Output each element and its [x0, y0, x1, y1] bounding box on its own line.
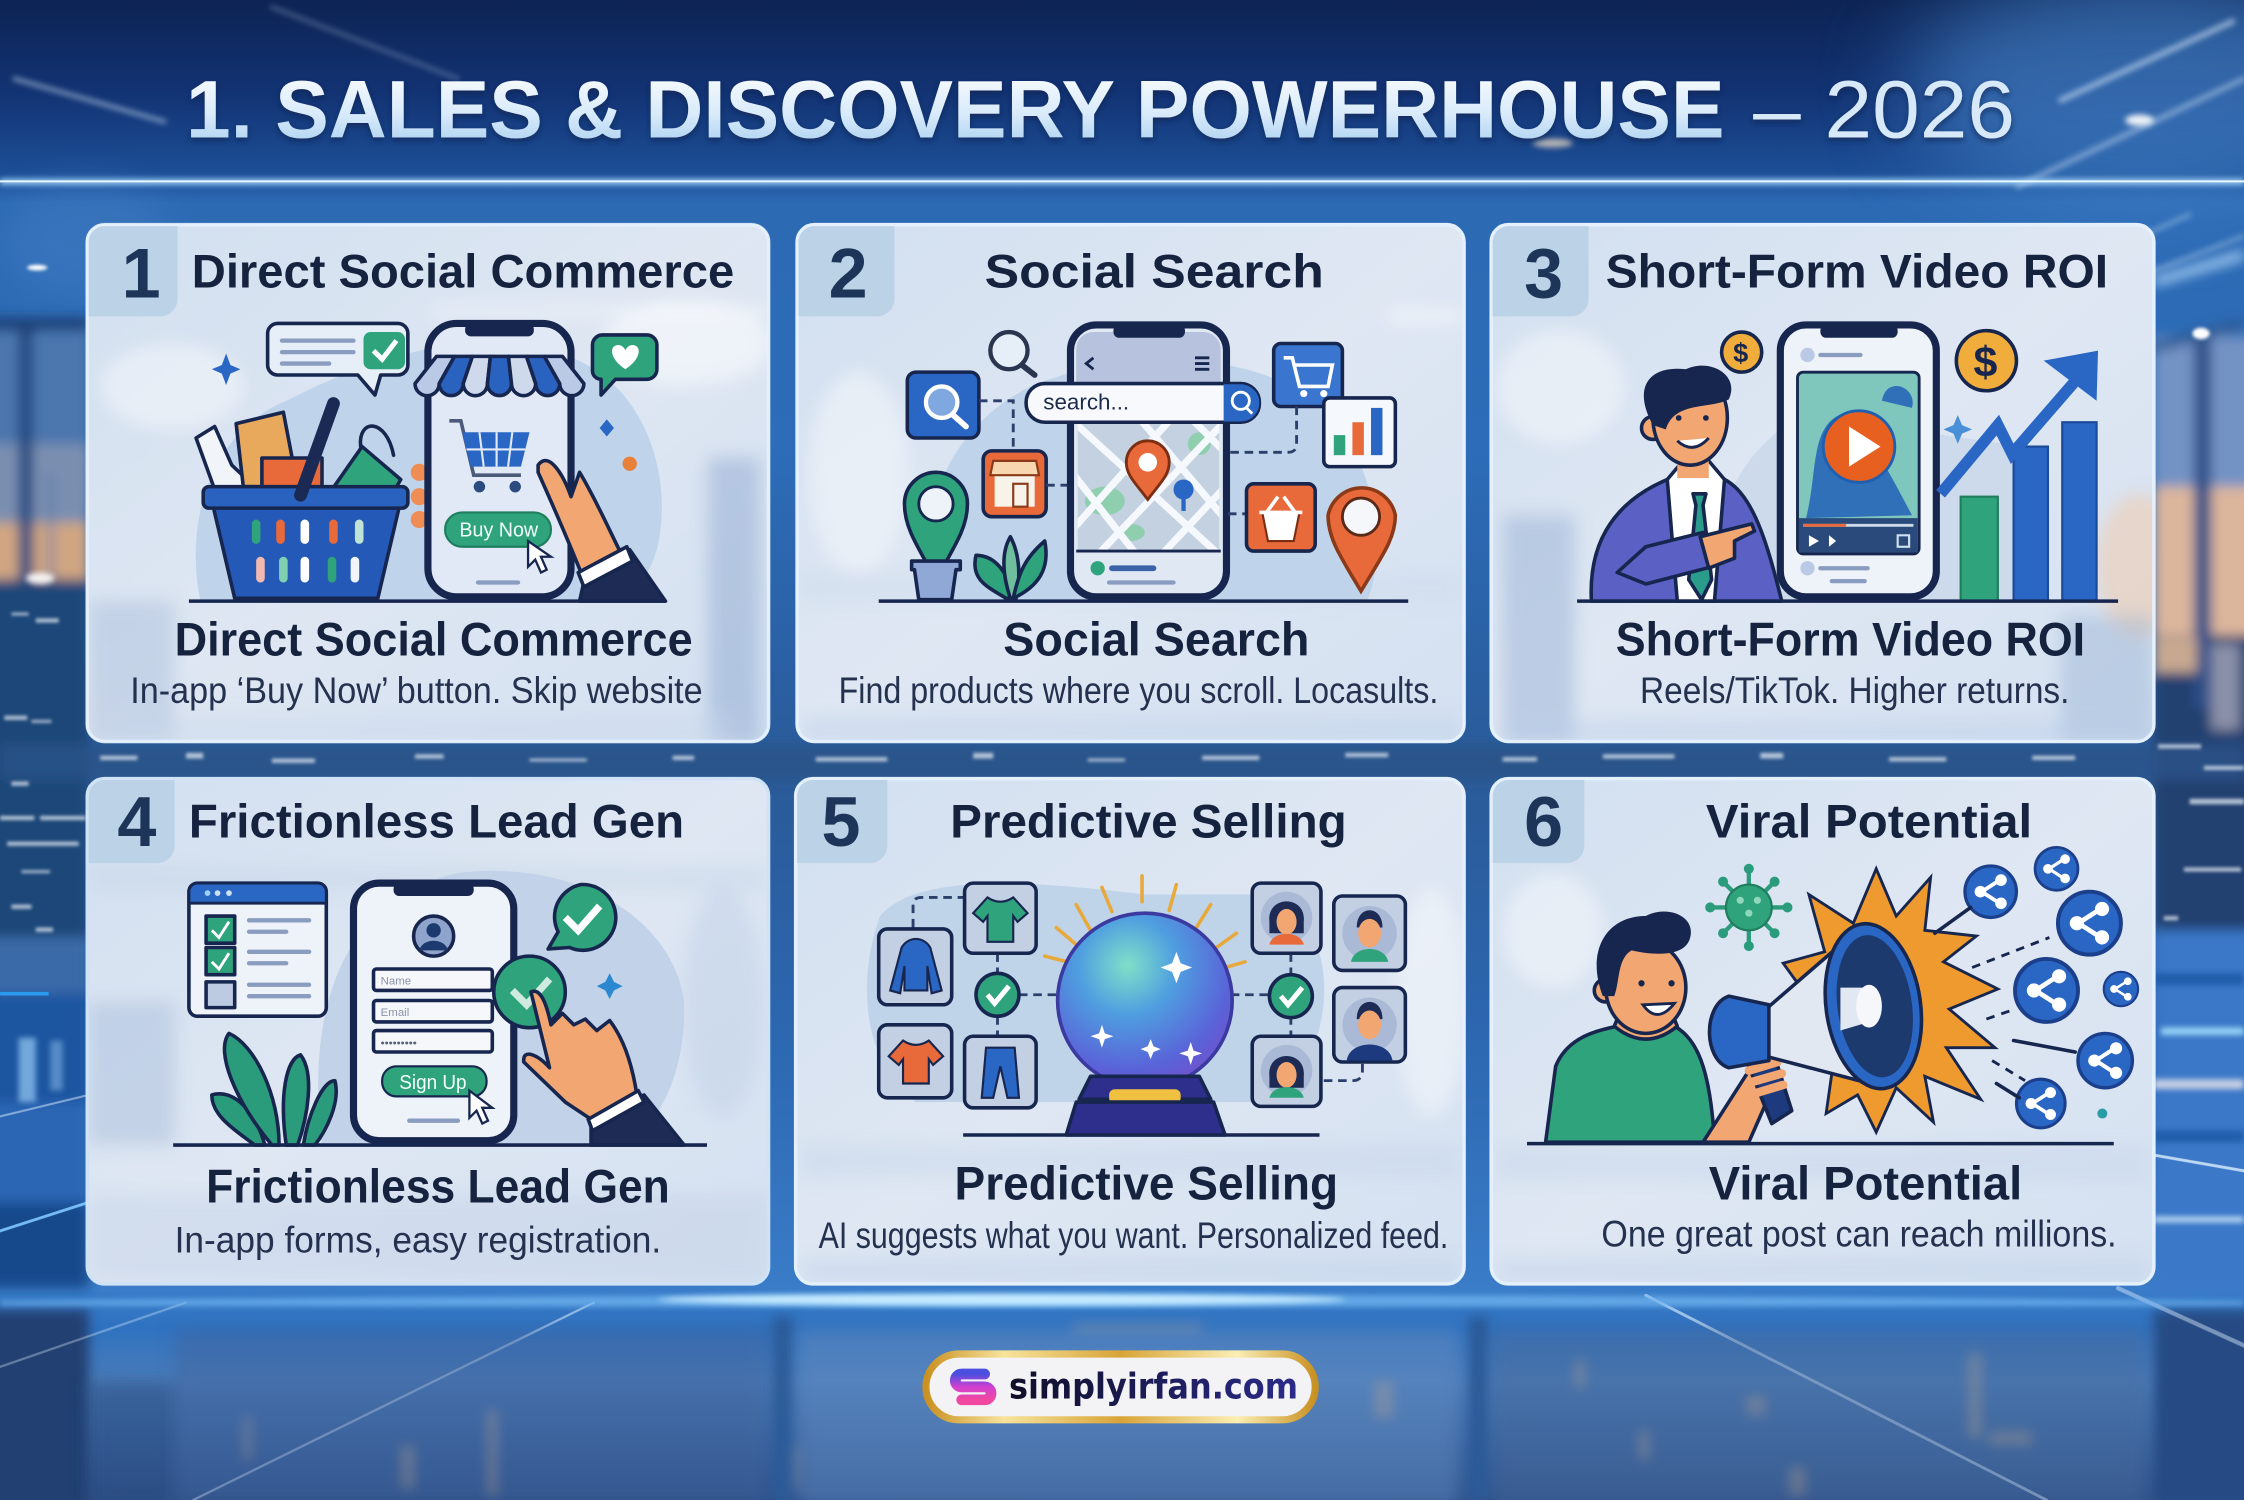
panel 3: short-form video ROI — [1491, 225, 2182, 744]
icon: groceries — [196, 412, 401, 490]
icon: bar chart tile — [1324, 398, 1395, 467]
icon: shopping basket — [203, 404, 408, 598]
number tab 6: 6 — [1524, 783, 1563, 861]
heading: Frictionless Lead Gen — [189, 795, 684, 848]
icon: plant — [212, 1033, 336, 1145]
button: Sign Up: Sign Up — [399, 1072, 467, 1094]
icon: outline magnifier — [990, 332, 1035, 375]
horizontal glow lines — [0, 179, 2244, 185]
icon: man — [1546, 912, 1775, 1142]
button: Sign Up — [382, 1066, 487, 1096]
icon: share nodes — [1965, 847, 2138, 1128]
search bar — [1026, 384, 1259, 422]
icon: heart bubble — [592, 335, 657, 395]
search bar: search... — [1043, 389, 1129, 414]
floor reflections — [89, 1328, 2147, 1500]
icon: green check circle — [494, 956, 565, 1028]
icon: sign-up phone: Name — [381, 976, 411, 988]
illustration: form, phone, hand — [173, 871, 707, 1145]
caption heading: Predictive Selling — [955, 1157, 1338, 1210]
icon: small coin — [1722, 332, 1762, 372]
icon: megaphone — [1709, 917, 1932, 1124]
illustration: map phone with search icons — [879, 325, 1408, 601]
icon: search tile — [907, 372, 979, 438]
number tab 4: 4 — [117, 783, 156, 861]
caption description: Find products where you scroll. Locasults. — [839, 669, 1438, 711]
caption description: In-app forms, easy registration. — [175, 1218, 661, 1260]
icon: check speech bubble — [548, 884, 616, 950]
icon: pointing hand — [524, 991, 684, 1145]
panel 6: viral potential — [1491, 779, 2154, 1284]
icon: presenter — [1591, 366, 1782, 601]
icon: sign-up phone: Email — [381, 1007, 409, 1019]
heading: Social Search — [985, 246, 1324, 299]
icon: hoodie tile — [879, 929, 952, 1005]
button: Buy Now: Buy Now — [459, 520, 539, 542]
icon: large coin: $ — [1974, 338, 1998, 386]
icon: cart — [449, 421, 530, 492]
number tab 1 — [89, 226, 177, 316]
caption heading: Social Search — [1003, 614, 1309, 667]
icon: virus — [1705, 864, 1792, 951]
icon: check left — [976, 973, 1019, 1016]
title: 1. SALES & DISCOVERY POWERHOUSE — [186, 64, 1725, 155]
heading: Short-Form Video ROI — [1606, 246, 2108, 299]
heading: Predictive Selling — [950, 795, 1347, 848]
icon: orange burst — [1783, 869, 1998, 1132]
number tab 5: 5 — [821, 783, 860, 861]
growth arrow — [1941, 351, 2098, 494]
number tab 5 — [797, 780, 887, 863]
icon: sign-up phone — [353, 883, 514, 1141]
number tab 2 — [799, 226, 894, 316]
icon: orange tee tile — [879, 1025, 952, 1098]
city lights — [0, 613, 2244, 932]
icon: jeans tile — [965, 1036, 1036, 1108]
panel 5: predictive selling — [796, 779, 1467, 1284]
icon: shopper tiles — [1252, 883, 1405, 1106]
heading: Viral Potential — [1706, 795, 2032, 848]
icon: phone with shop — [411, 323, 584, 597]
number tab 3 — [1493, 226, 1589, 316]
icon: basket tile — [1247, 484, 1315, 551]
caption description: AI suggests what you want. Personalized feed. — [819, 1214, 1448, 1256]
illustration: basket, phone and hand — [189, 323, 665, 601]
icon: green tee tile — [965, 883, 1036, 953]
title: – 2026 — [1753, 64, 2015, 155]
caption description: In-app ‘Buy Now’ button. Skip website — [130, 669, 703, 711]
caption description: One great post can reach millions. — [1601, 1213, 2117, 1255]
number tab 1: 1 — [122, 235, 161, 313]
heading: Direct Social Commerce — [192, 246, 734, 299]
icon: light rays — [1045, 876, 1245, 968]
icon: sign-up phone: ••••••••• — [381, 1037, 417, 1049]
panel 1: direct social commerce — [87, 225, 773, 744]
icon: video phone — [1780, 325, 1936, 597]
icon: play button — [1823, 411, 1895, 482]
icon: plant — [975, 537, 1046, 598]
panel 2: social search — [797, 225, 1464, 744]
caption heading: Frictionless Lead Gen — [206, 1160, 670, 1213]
caption heading: Viral Potential — [1709, 1157, 2022, 1210]
caption heading: Direct Social Commerce — [175, 614, 693, 667]
button: Buy Now — [445, 512, 551, 547]
number tab 6 — [1493, 780, 1584, 863]
number tab 3: 3 — [1524, 235, 1563, 313]
icon: large coin — [1956, 331, 2016, 391]
icon: check right — [1269, 975, 1312, 1018]
caption description: Reels/TikTok. Higher returns. — [1640, 669, 2069, 711]
icon: map pins — [1126, 441, 1169, 500]
illustration: presenter, video phone, growth chart — [1577, 325, 2118, 601]
illustration: crystal ball with products and shoppers — [867, 876, 1405, 1135]
icon: checklist window — [189, 883, 326, 1016]
brand name: simplyirfan.com — [1009, 1366, 1298, 1407]
icon: green pin and pot — [904, 472, 967, 600]
icon: store tile — [983, 451, 1046, 517]
bar chart — [1961, 422, 2097, 601]
number tab 4 — [89, 780, 175, 863]
icon: sparkle — [212, 354, 240, 385]
icon: crystal ball — [1058, 913, 1232, 1135]
caption heading: Short-Form Video ROI — [1616, 614, 2085, 667]
brand pill — [926, 1354, 1315, 1420]
icon: orange pin — [1328, 488, 1395, 591]
panel 4: frictionless lead gen — [87, 779, 769, 1284]
illustration: man with megaphone and shares — [1527, 847, 2138, 1144]
icon: S logo — [955, 1374, 991, 1400]
icon: small coin: $ — [1733, 337, 1748, 368]
icon: cart tile — [1274, 344, 1342, 406]
icon: hand holding phone — [538, 461, 665, 601]
icon: phone with map — [1066, 321, 1230, 600]
icon: chat bubble with check — [268, 323, 408, 395]
number tab 2: 2 — [829, 235, 868, 313]
